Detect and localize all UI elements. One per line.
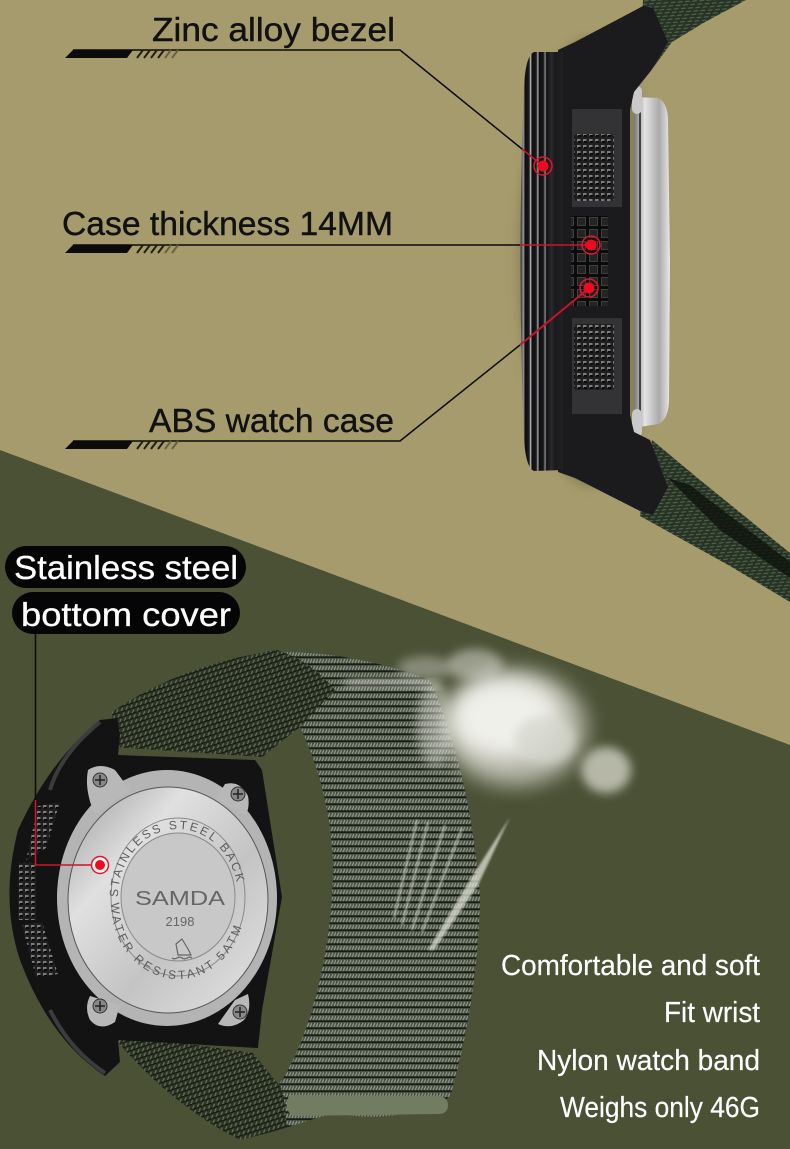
case side panels	[572, 109, 622, 414]
black watch case	[9, 718, 282, 1076]
case shadow	[518, 37, 662, 487]
leader line	[73, 345, 520, 441]
callout: ABS watch case	[65, 279, 598, 449]
callout: zinc alloy bezel	[65, 11, 552, 175]
background: lower dark olive panel	[0, 450, 790, 1149]
engraved text: top arc: STAINLESS STEEL BACK	[110, 820, 244, 896]
leader line	[73, 50, 543, 166]
watch back view with nylon band	[10, 650, 480, 1140]
red marker	[520, 236, 600, 254]
feature: Comfortable and soft: Comfortable and soft	[501, 950, 760, 982]
water resistance icon	[172, 939, 192, 959]
black ABS case	[558, 6, 668, 515]
steel back plate with screw ears	[57, 766, 277, 1027]
label: Case thickness 14MM: Case thickness 14MM	[62, 205, 393, 242]
strap: bottom nylon rope	[640, 440, 790, 602]
feature: Fit wrist: Fit wrist	[664, 997, 760, 1029]
left side grip pads	[18, 802, 60, 977]
red marker	[92, 856, 108, 874]
SAMDA logo: SAMDA	[135, 888, 226, 910]
steam cloud	[345, 649, 631, 793]
label: Zinc alloy bezel: Zinc alloy bezel	[152, 11, 395, 48]
brushed steel disc	[68, 787, 268, 1013]
lower grip pad	[574, 324, 614, 390]
callout: case thickness	[62, 205, 600, 254]
feature: Nylon watch band: Nylon watch band	[537, 1045, 760, 1077]
callout: stainless steel bottom cover	[5, 546, 246, 874]
label: ABS watch case: ABS watch case	[149, 402, 394, 439]
underline bar	[65, 441, 178, 449]
upper band section	[112, 650, 335, 757]
upper grip pad	[574, 134, 614, 201]
wind streaks on band	[394, 817, 510, 950]
watch side view	[518, 0, 790, 602]
red connector	[36, 800, 92, 865]
lower band section	[110, 1033, 287, 1140]
ribbed zinc alloy bezel	[520, 52, 563, 471]
underline bar	[65, 245, 178, 253]
strap: top nylon rope	[640, 0, 746, 72]
model number: 2198	[166, 914, 194, 929]
nylon band loop	[270, 652, 480, 1128]
band end tab	[286, 1095, 448, 1116]
red marker	[520, 279, 598, 345]
pill: Stainless steel: Stainless steel	[14, 549, 238, 586]
centre button grid	[571, 216, 608, 306]
red marker	[522, 149, 552, 175]
screws	[93, 773, 247, 1019]
feature list	[501, 950, 760, 1124]
leader line	[73, 244, 520, 246]
underline bar	[65, 50, 178, 58]
pill: bottom cover: bottom cover	[21, 596, 231, 633]
engraved text: bottom arc: WATER RESISTANT 5ATM	[111, 902, 242, 979]
steel back cover edge	[632, 86, 670, 437]
engraved ring	[111, 818, 245, 976]
feature: Weighs only 46G: Weighs only 46G	[560, 1092, 760, 1124]
leader line	[34, 630, 36, 800]
